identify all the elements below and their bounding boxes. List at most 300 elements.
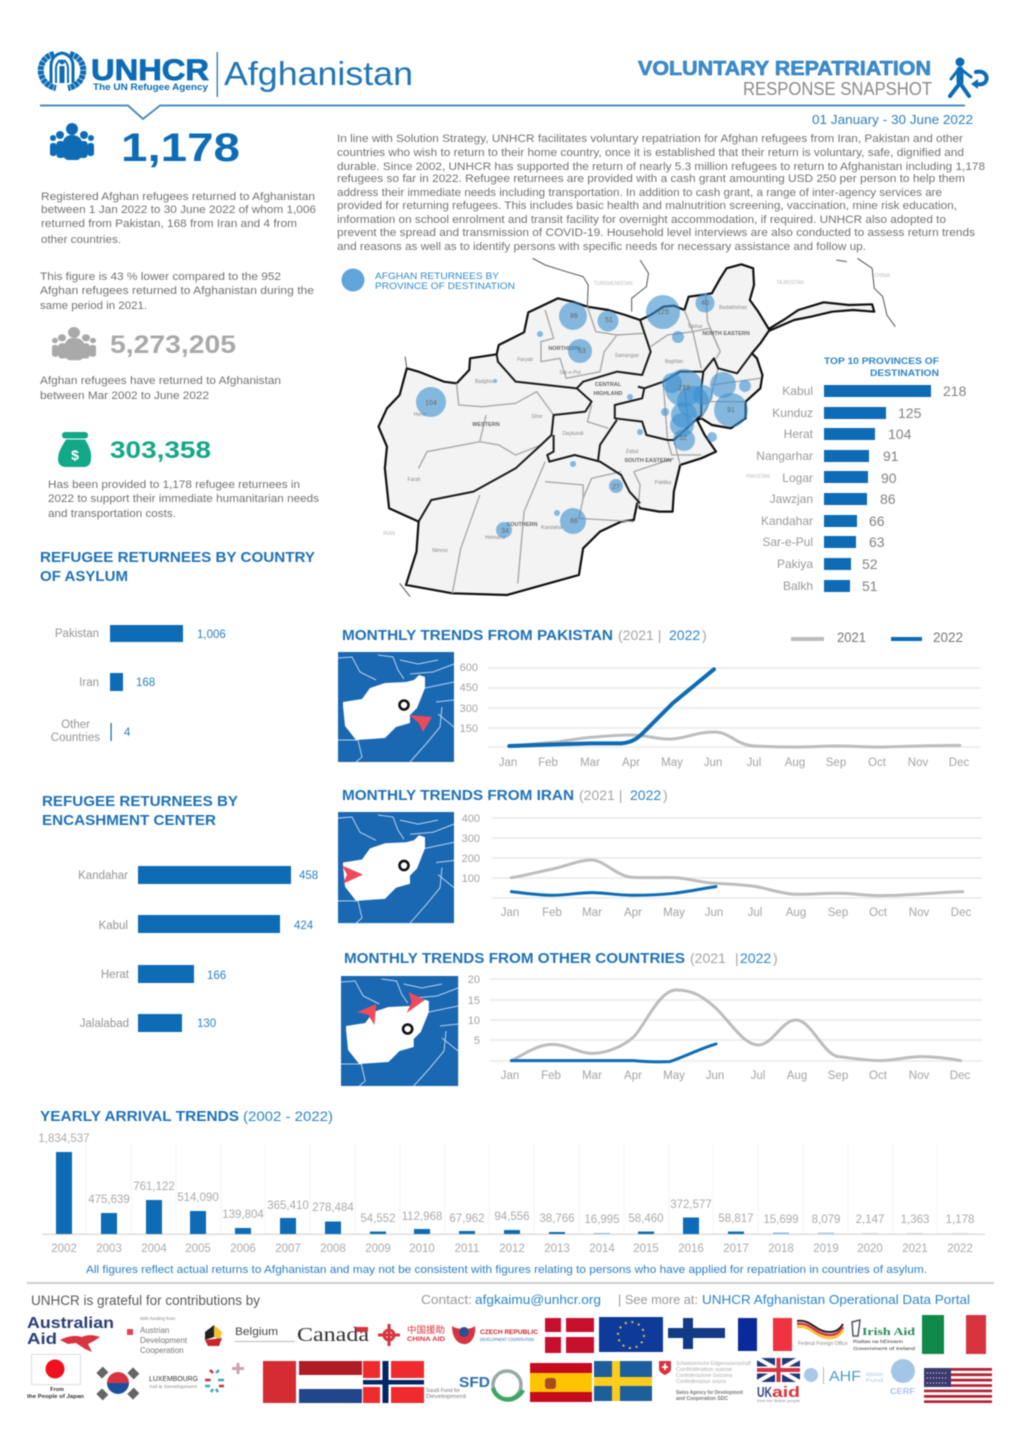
- year labels: 2014: [589, 1243, 615, 1255]
- map region and province labels: Zabul: [626, 449, 638, 455]
- year labels: 2011: [455, 1243, 479, 1255]
- logo wordmark: UNHCR: [91, 54, 209, 87]
- line chart: monthly trends from Iran: Sep: [828, 907, 848, 919]
- value labels: 54,552: [360, 1213, 396, 1225]
- map region and province labels: Herat: [414, 412, 427, 418]
- line chart: monthly trends from Pakistan: 450: [460, 682, 478, 694]
- flag: Spain: [530, 1363, 592, 1402]
- value labels: 58,460: [628, 1213, 664, 1225]
- line chart: monthly trends from Iran: Nov: [909, 907, 929, 919]
- bar chart: returnees by country of asylum: Pakistan: [55, 628, 99, 640]
- text block: cumulative note: Afghan refugees have returned to Afghanistan: [40, 375, 281, 387]
- map region and province labels: TURKMENISTAN: [593, 281, 633, 287]
- locator map: Pakistan: [338, 652, 454, 762]
- line chart: monthly trends from Pakistan: Dec: [949, 757, 969, 769]
- line chart: monthly trends from other countries: 5: [474, 1035, 480, 1047]
- heading: monthly trends from Iran: ): [663, 787, 668, 803]
- icon: people grey: [52, 327, 96, 360]
- logo: Austrian Development Cooperation: With funding from: [140, 1316, 176, 1321]
- map region and province labels: HIGHLAND: [593, 391, 623, 397]
- flag: Norway: [363, 1361, 424, 1403]
- map region and province labels: Faryab: [517, 357, 533, 363]
- map region and province labels: SOUTH EASTERN: [624, 458, 672, 464]
- map legend: [342, 268, 515, 292]
- logo: Austrian Development Cooperation: Austrian: [140, 1326, 169, 1335]
- text block: programme description: countries who wish to return to their home country, once it is established that their return is voluntary, safe, dignified and: [337, 147, 964, 159]
- line chart: monthly trends from Iran: 400: [462, 813, 480, 825]
- map region and province labels: IRAN: [383, 531, 395, 537]
- logo: small cross: [232, 1363, 244, 1374]
- flag: Finland: [668, 1318, 725, 1349]
- text block: programme description: refugees so far in 2022. Refugee returnees are provided with a cash grant amounting USD 250 per person to help them: [337, 173, 965, 185]
- line chart: monthly trends from other countries: 10: [468, 1015, 480, 1027]
- icon: people: [50, 123, 94, 160]
- footer: contact details: afgkaimu@unhcr.org: [475, 1292, 601, 1307]
- logo: Switzerland SDC: Confederazione Svizzera: [676, 1373, 732, 1379]
- heading: monthly trends from Iran: 2022: [630, 787, 661, 803]
- logo: Switzerland SDC: Swiss Agency for Development: [676, 1390, 743, 1396]
- chart footnote: All figures reflect actual returns to Afghanistan and may not be consistent with figures relating to persons who have applied for repatriation in countries of asylum.: [86, 1264, 927, 1276]
- flag: Sweden: [594, 1361, 652, 1401]
- bar chart: returnees by encashment center: [78, 866, 318, 1032]
- title: Afghanistan: [224, 55, 413, 92]
- text block: comparison with 2021: This figure is 43 % lower compared to the 952: [40, 271, 281, 283]
- text block: programme description: [337, 133, 985, 253]
- value labels: 278,484: [312, 1202, 354, 1214]
- bar chart: top 10 provinces of destination: 90: [881, 470, 897, 486]
- value labels: 112,968: [402, 1211, 442, 1223]
- heading: monthly trends from other countries: |: [735, 950, 739, 966]
- bar chart: returnees by country of asylum: 1,006: [197, 629, 226, 641]
- logo: Switzerland SDC: Confederaziun svizra: [676, 1379, 726, 1385]
- line chart: monthly trends from other countries: May: [663, 1070, 685, 1082]
- line chart: monthly trends from other countries: Mar: [582, 1070, 602, 1082]
- bar chart: top 10 provinces of destination: Kunduz: [772, 406, 813, 420]
- chart heading: DESTINATION: [870, 368, 939, 379]
- text block: programme description: In line with Solution Strategy, UNHCR facilitates voluntary repatriation for Afghan refugees from Iran, Pakistan and other: [337, 133, 963, 145]
- heading: monthly trends from Pakistan: MONTHLY TRENDS FROM PAKISTAN: [342, 627, 613, 644]
- heading: monthly trends from Iran: [342, 787, 668, 804]
- value labels: 58,817: [718, 1213, 754, 1225]
- icon: UNHCR emblem: [41, 53, 83, 88]
- reporting period: 01 January - 30 June 2022: [812, 112, 973, 127]
- year labels: 2013: [544, 1243, 570, 1255]
- logo: Luxembourg: Aid & Development: [149, 1384, 198, 1389]
- logo: Switzerland SDC: and Cooperation SDC: [676, 1396, 728, 1402]
- bar chart: returnees by country of asylum: Iran: [79, 677, 99, 689]
- heading: yearly arrival trends: [40, 1108, 333, 1125]
- bar chart: top 10 provinces of destination: [756, 356, 967, 594]
- key figure: registered returnees: 1,178: [121, 126, 240, 170]
- text block: cash grant note: [48, 479, 320, 520]
- key figure: registered returnees: [50, 123, 240, 170]
- value labels: 514,090: [177, 1192, 219, 1204]
- logo: Saudi Fund for Development: Saudi Fund for: [426, 1388, 460, 1394]
- bar chart: top 10 provinces of destination: 86: [880, 491, 896, 507]
- year labels: 2022: [947, 1243, 973, 1255]
- text block: programme description: provided for returning refugees. This includes basic health and malnutrition screening, vaccination, mine risk education,: [337, 200, 957, 212]
- value labels: 1,834,537: [38, 1133, 90, 1145]
- bubble values: [425, 300, 735, 535]
- year labels: 2006: [230, 1243, 256, 1255]
- heading: monthly trends from Iran: (2021 |: [579, 787, 622, 803]
- chart legend: 2021: [837, 630, 866, 645]
- line chart: monthly trends from Pakistan: Sep: [826, 757, 846, 769]
- text block: returnee summary: other countries.: [41, 234, 121, 246]
- logo: Saudi Fund for Development: [426, 1371, 523, 1400]
- line chart: monthly trends from Iran: May: [663, 907, 685, 919]
- bar chart: returnees by country of asylum: Countries: [51, 732, 100, 744]
- flag: Denmark: [545, 1318, 594, 1353]
- logo: CERF: [890, 1359, 915, 1396]
- line chart: monthly trends from other countries: Nov: [909, 1070, 929, 1082]
- year labels: 2010: [409, 1243, 435, 1255]
- logo: Austrian Development Cooperation: Cooperation: [140, 1346, 184, 1355]
- year labels: 2016: [678, 1243, 704, 1255]
- logo: AHF: AHF: [829, 1368, 861, 1385]
- line chart: monthly trends from Iran: Jan: [501, 907, 519, 919]
- line chart: monthly trends from Iran: 200: [462, 853, 480, 865]
- bar chart: top 10 provinces of destination: 218: [943, 383, 967, 399]
- logo: Belgium: Belgium: [235, 1326, 278, 1338]
- bubble values: 40: [701, 300, 709, 307]
- line chart: monthly trends from other countries: Jan: [501, 1070, 519, 1082]
- line chart: monthly trends from other countries: 15: [468, 995, 480, 1007]
- bar chart: returnees by encashment center: Kabul: [99, 920, 128, 932]
- map region and province labels: Takhar: [687, 324, 703, 330]
- value labels: 94,556: [494, 1211, 530, 1223]
- logo: Australian Aid: Australian: [27, 1315, 114, 1332]
- logo: Austrian Development Cooperation: Development: [140, 1336, 188, 1345]
- line chart: monthly trends from Pakistan: Aug: [785, 757, 805, 769]
- bar chart: yearly arrivals: [38, 1133, 985, 1255]
- logo: UK aid: from the British people: [757, 1399, 800, 1403]
- line chart: monthly trends from other countries: Oct: [869, 1070, 888, 1082]
- heading: returnees by country of asylum: OF ASYLUM: [40, 568, 128, 585]
- line chart: monthly trends from Pakistan: Nov: [908, 757, 928, 769]
- logo: Luxembourg: LUXEMBOURG: [149, 1376, 198, 1383]
- logo: Irish Aid: Rialtas na hÉireann: [853, 1338, 904, 1344]
- year labels: 2015: [633, 1243, 659, 1255]
- map region and province labels: TAJIKISTAN: [776, 280, 804, 286]
- heading: monthly trends from Iran: MONTHLY TRENDS FROM IRAN: [342, 787, 574, 804]
- logo: Australian Aid: Aid: [27, 1331, 57, 1348]
- heading: monthly trends from other countries: 2022: [740, 950, 771, 966]
- line chart: monthly trends from other countries: [468, 974, 982, 1082]
- icon: money bag: $: [71, 447, 79, 463]
- line chart: monthly trends from Pakistan: Mar: [580, 757, 600, 769]
- line chart: monthly trends from Iran: Dec: [951, 907, 971, 919]
- logo: China Aid: [378, 1324, 446, 1346]
- bar chart: returnees by country of asylum: 168: [136, 677, 155, 689]
- text block: returnee summary: [41, 191, 316, 246]
- text block: comparison with 2021: same period in 2021.: [40, 300, 147, 312]
- logo: Saudi Fund for Development: Development: [426, 1394, 467, 1400]
- bar chart: returnees by country of asylum: [51, 625, 226, 744]
- line chart: monthly trends from Iran: Apr: [624, 907, 642, 919]
- year labels: 2009: [365, 1243, 391, 1255]
- flag: United States: [924, 1368, 958, 1403]
- heading: returnees by country of asylum: [40, 549, 315, 585]
- logo: AHF: [804, 1367, 883, 1385]
- text block: comparison with 2021: Afghan refugees returned to Afghanistan during the: [40, 285, 314, 297]
- report title: [638, 58, 932, 99]
- logo: China Aid: 中国援助: [407, 1324, 445, 1335]
- map region and province labels: NORTHERN: [548, 346, 580, 352]
- map region and province labels: Ghor: [531, 414, 543, 420]
- value labels: 475,639: [88, 1194, 130, 1206]
- heading: yearly arrival trends: (2002 - 2022): [243, 1108, 333, 1124]
- logo: UK aid: UK: [757, 1384, 772, 1401]
- heading: monthly trends from Pakistan: 2022: [669, 627, 700, 643]
- footer: contact details: | See more at:: [618, 1292, 698, 1307]
- logo: Belgium: [235, 1326, 295, 1342]
- year labels: 2002: [51, 1243, 77, 1255]
- locator map: Iran: [338, 812, 454, 923]
- key figure: cumulative returnees: [52, 327, 236, 360]
- bar chart: top 10 provinces of destination: Nangarhar: [756, 449, 813, 463]
- bar chart: returnees by encashment center: 166: [207, 970, 226, 982]
- line chart: monthly trends from Iran: Jul: [748, 907, 762, 919]
- line chart: monthly trends from other countries: Feb: [541, 1070, 561, 1082]
- line chart: monthly trends from other countries: Apr: [624, 1070, 642, 1082]
- bar chart: top 10 provinces of destination: 104: [888, 426, 912, 442]
- map region and province labels: PAKISTAN: [746, 474, 770, 480]
- year labels: 2008: [320, 1243, 346, 1255]
- map region and province labels: Badghis: [475, 379, 494, 385]
- year labels: 2018: [768, 1243, 794, 1255]
- line chart: monthly trends from other countries: Jul: [751, 1070, 765, 1082]
- value labels: [38, 1133, 974, 1226]
- footer: contributions heading: UNHCR is grateful for contributions by: [31, 1293, 260, 1308]
- logo: Czech Republic: [452, 1326, 538, 1344]
- line chart: monthly trends from Pakistan: Feb: [538, 757, 558, 769]
- footer: contact details: UNHCR Afghanistan Operational Data Portal: [702, 1292, 970, 1307]
- key figure: cumulative returnees: 5,273,205: [110, 331, 236, 359]
- logo: CERF: CERF: [890, 1387, 915, 1396]
- text block: programme description: durable. Since 2002, UNHCR has supported the return of nearly 5.3 million refugees to return to Afghanistan including 1,178: [337, 161, 985, 173]
- line chart: monthly trends from Iran: 100: [462, 873, 480, 885]
- heading: monthly trends from Pakistan: (2021 |: [618, 627, 661, 643]
- value labels: 67,962: [449, 1213, 485, 1225]
- logo: Saudi Fund for Development: SFD: [459, 1374, 490, 1391]
- bubble values: 51: [605, 317, 613, 324]
- logo: Czech Republic: CZECH REPUBLIC: [480, 1329, 538, 1336]
- chart legend: 2022: [933, 630, 963, 645]
- logo: Austrian Development Cooperation: [127, 1316, 188, 1355]
- line chart: monthly trends from Iran: Jun: [705, 907, 723, 919]
- map region and province labels: Paktika: [655, 480, 671, 486]
- line chart: monthly trends from Pakistan: Jul: [747, 757, 761, 769]
- footer: contact details: Contact:: [421, 1292, 472, 1307]
- line chart: monthly trends from other countries: Sep: [828, 1070, 848, 1082]
- map: returnees by province of destination: [379, 258, 895, 597]
- text block: cumulative note: [40, 375, 281, 402]
- line chart: monthly trends from Iran: Mar: [582, 907, 602, 919]
- heading: returnees by encashment center: ENCASHMENT CENTER: [42, 812, 216, 829]
- bar chart: top 10 provinces of destination: 91: [883, 448, 899, 464]
- year labels: 2003: [96, 1243, 122, 1255]
- map legend: AFGHAN RETURNEES BY: [375, 271, 500, 282]
- year labels: 2019: [813, 1243, 839, 1255]
- logo: Canada: Canada: [297, 1324, 369, 1346]
- bar chart: top 10 provinces of destination: 125: [898, 405, 922, 421]
- bar chart: top 10 provinces of destination: Kabul: [782, 384, 813, 398]
- line chart: monthly trends from Iran: Feb: [542, 907, 562, 919]
- line chart: monthly trends from other countries: Jun: [706, 1070, 724, 1082]
- heading: returnees by encashment center: REFUGEE RETURNEES BY: [42, 793, 238, 810]
- bar chart: top 10 provinces of destination: 66: [869, 513, 885, 529]
- bubble values: 34: [501, 528, 509, 535]
- map region and province labels: Baghlan: [665, 359, 683, 365]
- year labels: 2020: [857, 1243, 883, 1255]
- heading: returnees by encashment center: [42, 793, 238, 829]
- map region and province labels: Daykundi: [563, 431, 583, 437]
- logo: UK aid: aid: [772, 1384, 800, 1401]
- line chart: monthly trends from other countries: 20: [468, 974, 480, 986]
- logo: Australian Aid: [27, 1315, 114, 1352]
- logo: Belgium emblem: [205, 1325, 222, 1346]
- header: UNHCR logo and country title: [41, 52, 413, 97]
- bar chart: returnees by encashment center: 424: [294, 920, 314, 932]
- year labels: 2007: [275, 1243, 301, 1255]
- key figure: cash grant: 303,358: [110, 437, 211, 464]
- value labels: 1,178: [946, 1214, 974, 1226]
- logo: Luxembourg: [149, 1370, 224, 1392]
- year labels: [51, 1243, 973, 1255]
- text block: cumulative note: between Mar 2002 to June 2022: [40, 390, 209, 402]
- line chart: monthly trends from Pakistan: Jan: [499, 757, 517, 769]
- logo: Japan: From: [50, 1387, 64, 1393]
- heading: monthly trends from other countries: MONTHLY TRENDS FROM OTHER COUNTRIES: [344, 950, 685, 967]
- bar chart: top 10 provinces of destination: Jawzjan: [770, 492, 813, 506]
- bar chart: top 10 provinces of destination: 63: [869, 534, 885, 550]
- bar chart: top 10 provinces of destination: Herat: [784, 427, 814, 441]
- value labels: 2,147: [856, 1214, 884, 1226]
- bar chart: top 10 provinces of destination: Kandahar: [761, 514, 813, 528]
- map region and province labels: CENTRAL: [595, 382, 622, 388]
- year labels: 2012: [499, 1243, 525, 1255]
- bubble values: 27: [612, 484, 620, 491]
- heading: yearly arrival trends: YEARLY ARRIVAL TRENDS: [40, 1108, 239, 1125]
- bar chart: returnees by encashment center: Herat: [101, 969, 130, 981]
- value labels: 372,577: [670, 1199, 712, 1211]
- report title: VOLUNTARY REPATRIATION: [638, 58, 931, 80]
- icon: walking person with return arrow: [950, 58, 987, 96]
- line chart: monthly trends from Iran: [462, 813, 982, 919]
- logo: Germany: [797, 1321, 848, 1347]
- logo: Switzerland SDC: [659, 1361, 752, 1402]
- line chart: monthly trends from Pakistan: Oct: [868, 757, 887, 769]
- text block: cash grant note: and transportation costs.: [48, 508, 176, 520]
- key figure: cash grant: [58, 432, 211, 467]
- chart legend: [791, 630, 963, 645]
- logo: Switzerland SDC: Confédération suisse: [676, 1367, 732, 1373]
- map legend: PROVINCE OF DESTINATION: [375, 281, 515, 292]
- bar chart: top 10 provinces of destination: Pakiya: [777, 557, 813, 571]
- logo: Germany: Federal Foreign Office: [798, 1341, 848, 1347]
- map region and province labels: Helmand: [485, 535, 505, 541]
- bubble values: 52: [679, 435, 687, 442]
- line chart: monthly trends from Pakistan: Apr: [622, 757, 640, 769]
- bar chart: returnees by encashment center: Jalalabad: [80, 1018, 129, 1030]
- bubble values: 63: [578, 348, 586, 355]
- province bubbles: [416, 294, 751, 538]
- value labels: 15,699: [763, 1214, 799, 1226]
- bubble values: 66: [570, 518, 578, 525]
- text block: programme description: prevent the spread and transmission of COVID-19. Household level interviews are also conducted to assess return trends: [337, 227, 976, 239]
- map region and province labels: NORTH EASTERN: [702, 331, 750, 337]
- map region and province labels: Badakhshan: [719, 305, 747, 311]
- value labels: 8,079: [812, 1214, 840, 1226]
- bar chart: returnees by encashment center: 458: [299, 870, 318, 882]
- bubble values: 125: [657, 309, 669, 316]
- bar chart: top 10 provinces of destination: Balkh: [783, 579, 813, 593]
- heading: monthly trends from other countries: ): [773, 950, 778, 966]
- flag: European Union: [599, 1317, 663, 1352]
- logo: Irish Aid: Irish Aid: [862, 1326, 915, 1338]
- logo: Japan: the People of Japan: [27, 1394, 85, 1400]
- bubble values: 104: [425, 400, 437, 407]
- donor logos: row 1: [27, 1315, 986, 1355]
- value labels: 139,804: [222, 1209, 264, 1221]
- flag: Italy: [922, 1315, 986, 1354]
- heading: monthly trends from Pakistan: ): [702, 627, 707, 643]
- line chart: monthly trends from other countries: Aug: [787, 1070, 807, 1082]
- year labels: 2021: [902, 1243, 928, 1255]
- year labels: 2004: [141, 1243, 167, 1255]
- line chart: monthly trends from other countries: Dec: [950, 1070, 970, 1082]
- map region and province labels: [383, 273, 890, 554]
- map region and province labels: Kandahar: [541, 525, 563, 531]
- bar chart: returnees by country of asylum: 4: [124, 727, 131, 739]
- bar chart: returnees by country of asylum: Other: [61, 719, 90, 731]
- value labels: 16,995: [584, 1214, 620, 1226]
- footer: contact details: [421, 1292, 970, 1307]
- icon: money bag: [58, 432, 91, 467]
- bar chart: returnees by encashment center: Kandahar: [78, 870, 128, 882]
- text block: cash grant note: 2022 to support their immediate humanitarian needs: [48, 493, 320, 505]
- logo: Japan: [27, 1354, 85, 1400]
- line chart: monthly trends from Pakistan: 600: [460, 662, 478, 674]
- logo: AHF: Fund: [866, 1378, 883, 1384]
- map region and province labels: Samangan: [615, 353, 639, 359]
- bar chart: top 10 provinces of destination: Logar: [782, 471, 813, 485]
- heading: returnees by country of asylum: REFUGEE RETURNEES BY COUNTRY: [40, 549, 315, 566]
- locator map: other countries: [341, 976, 458, 1086]
- flag: Netherlands: [299, 1361, 362, 1403]
- logo: AHF: Afghanistan: [866, 1372, 883, 1378]
- flag: red panel: [263, 1361, 296, 1403]
- map region and province labels: CHINA: [874, 273, 890, 279]
- logo: Irish Aid: Government of Ireland: [853, 1346, 916, 1351]
- year labels: 2017: [723, 1243, 749, 1255]
- line chart: monthly trends from Iran: Aug: [786, 907, 806, 919]
- logo: Czech Republic: DEVELOPMENT COOPERATION: [480, 1337, 534, 1342]
- map region and province labels: Nimroz: [432, 548, 448, 554]
- line chart: monthly trends from Iran: 300: [462, 833, 480, 845]
- header rule with notch: [40, 106, 965, 119]
- report title: RESPONSE SNAPSHOT: [743, 79, 932, 99]
- text block: programme description: address their immediate needs including transportation. In addition to cash grant, a range of inter-agency services are: [337, 187, 942, 199]
- line chart: monthly trends from Pakistan: Jun: [704, 757, 722, 769]
- bubble values: 218: [678, 385, 690, 392]
- text block: comparison with 2021: [40, 271, 314, 312]
- logo: China Aid: CHINA AID: [407, 1337, 446, 1343]
- value labels: 38,766: [539, 1213, 575, 1225]
- bar chart: top 10 provinces of destination: Sar-e-Pul: [762, 535, 813, 549]
- text block: returnee summary: returned from Pakistan, 168 from Iran and 4 from: [41, 218, 297, 230]
